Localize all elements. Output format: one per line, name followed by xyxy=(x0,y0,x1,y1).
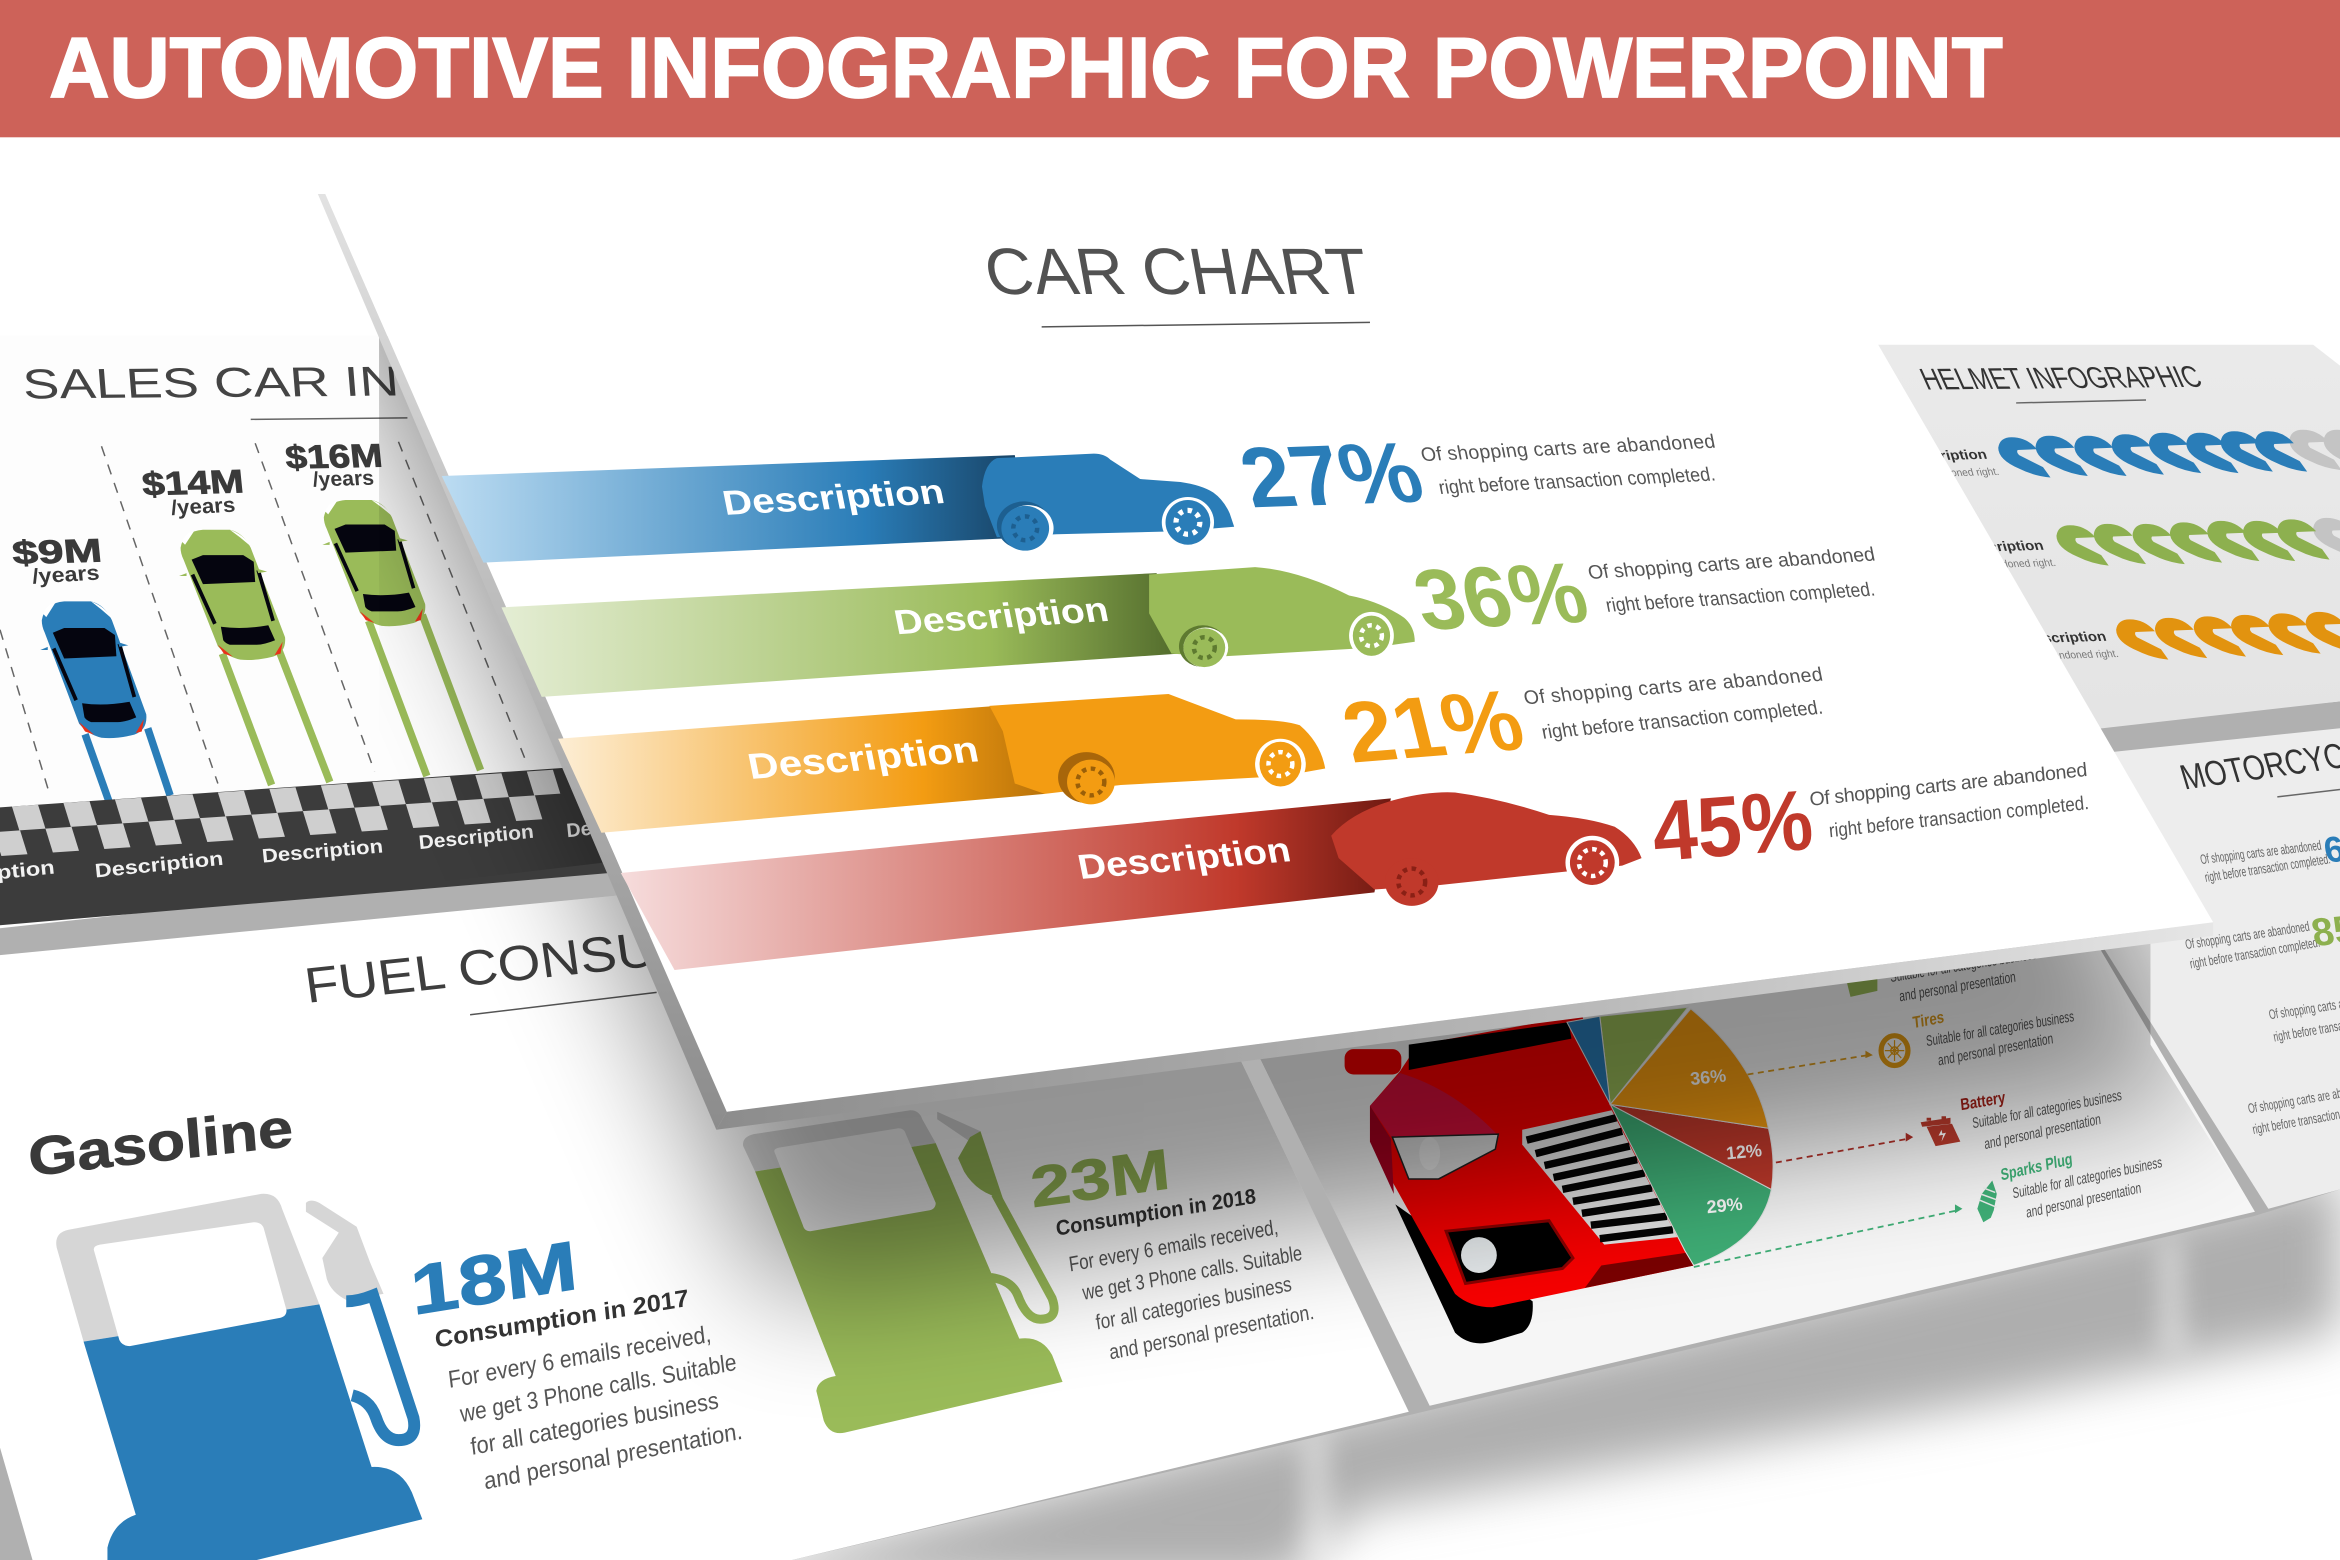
bar: red car 45%: 45% xyxy=(1649,773,1816,880)
lane dividers xyxy=(0,442,525,795)
panel: car parts pie slide xyxy=(1239,910,2255,1406)
finish line band: Description xyxy=(418,821,535,854)
callout: tires xyxy=(1748,1007,2075,1074)
callout: battery: and personal presentation xyxy=(1984,1111,2102,1153)
callout: sparks plug xyxy=(1694,1149,2163,1267)
callout: tires: Tires xyxy=(1912,1007,1945,1032)
heading: car chart: CAR CHART xyxy=(979,235,1374,309)
bar: green car 36%: right before transaction completed. xyxy=(1604,579,1877,617)
icon: tire xyxy=(1881,1036,1908,1066)
car lane: $9M xyxy=(10,532,170,801)
callout: top legend: and personal presentation xyxy=(1898,969,2017,1005)
callout: sparks plug: and personal presentation xyxy=(2025,1180,2142,1222)
bar: red car 45% xyxy=(621,759,2090,970)
heading: helmet: HELMET INFOGRAPHIC xyxy=(1915,360,2207,396)
stat: 18M: 18M xyxy=(407,1226,581,1330)
finish line band: Description xyxy=(261,835,384,868)
stat rows xyxy=(2184,828,2340,1137)
stat: 18M: For every 6 emails received, xyxy=(447,1321,713,1394)
row: green helmets xyxy=(1959,518,2340,572)
pie chart: 29% xyxy=(1706,1194,1743,1217)
car lane: $14M: /years xyxy=(170,494,236,520)
wheels xyxy=(1058,739,1306,804)
wheels xyxy=(1385,836,1619,906)
car lane: $9M: /years xyxy=(31,562,100,588)
bar: red car 45%: Description xyxy=(1075,831,1294,887)
stat: 23M: we get 3 Phone calls. Suitable xyxy=(1080,1242,1304,1305)
bar: green car 36%: 36% xyxy=(1405,546,1597,648)
row: blue helmets: Description xyxy=(1902,447,1989,464)
bar: orange car 21% xyxy=(558,664,1825,833)
callout: battery: Battery xyxy=(1959,1088,2007,1114)
car lane: $9M: $9M xyxy=(10,532,104,571)
row: green helmets: Description xyxy=(1959,538,2045,555)
heading: fuel consumption: FUEL CONSU xyxy=(301,921,660,1014)
callout: battery: Suitable for all categories business xyxy=(1972,1087,2123,1132)
stat: 18M: we get 3 Phone calls. Suitable xyxy=(458,1349,738,1428)
pie chart xyxy=(1567,1007,1773,1266)
row: blue helmets xyxy=(1902,430,2340,480)
drop shadow below slides xyxy=(701,1171,2340,1560)
panel: helmet slide xyxy=(1851,345,2340,730)
callout: top legend xyxy=(1845,946,2037,1005)
icon: blue fuel pump xyxy=(56,1194,422,1560)
callout: sparks plug: Suitable for all categories business xyxy=(2012,1154,2163,1202)
bar: blue car 27%: Description xyxy=(719,473,948,523)
heading: gasoline: Gasoline xyxy=(26,1098,295,1188)
row: orange helmets xyxy=(2022,612,2340,663)
callout: top legend: Suitable for all categories business xyxy=(1890,946,2037,986)
finish line band xyxy=(0,767,675,925)
car lane: $16M: /years xyxy=(312,467,375,491)
panel: motorcycle slide xyxy=(2089,728,2340,1209)
bar: blue car 27%: right before transaction completed. xyxy=(1437,464,1717,499)
heading: sales car: SALES CAR IN xyxy=(21,358,401,407)
icon: green fuel pump xyxy=(743,1110,1063,1433)
bar: green car 36%: Of shopping carts are abandoned xyxy=(1586,544,1877,584)
bar: blue car 27% xyxy=(442,425,1717,563)
icon: battery xyxy=(1921,1116,1960,1146)
row: green helmets: Of abandoned right. xyxy=(1964,557,2057,572)
callout: tires: Suitable for all categories business xyxy=(1925,1008,2075,1050)
bar: orange car 21%: right before transaction completed. xyxy=(1540,697,1825,744)
car lane: $14M: $14M xyxy=(140,462,245,502)
car lane: $16M xyxy=(284,437,481,776)
callout: battery xyxy=(1776,1087,2123,1163)
finish line band: Description xyxy=(565,810,675,842)
bar: orange car 21%: Description xyxy=(744,728,982,787)
illustration: red car front xyxy=(1345,1015,1694,1343)
stat: 23M: for all categories business xyxy=(1094,1273,1293,1335)
row: blue helmets: Of abandoned right. xyxy=(1908,466,2001,480)
stat: 18M xyxy=(407,1226,744,1495)
callout: sparks plug: Sparks Plug xyxy=(2000,1149,2073,1184)
bar: orange car 21%: 21% xyxy=(1333,673,1533,781)
stat: 18M: Consumption in 2017 xyxy=(434,1285,690,1354)
slide gaps underlay xyxy=(0,701,2340,1560)
stat: 23M xyxy=(1028,1137,1315,1364)
panel: car chart main slide xyxy=(318,194,2213,1130)
bar: green car 36% xyxy=(501,544,1877,697)
wheels xyxy=(1179,612,1394,668)
car lane: $14M xyxy=(140,462,330,785)
row: orange helmets: Of abandoned right. xyxy=(2027,648,2120,663)
pie chart: 36% xyxy=(1689,1065,1727,1089)
finish line band: Description xyxy=(94,848,224,882)
pie chart: 12% xyxy=(1725,1140,1763,1164)
stat: 18M: and personal presentation. xyxy=(483,1418,744,1495)
shadow cast by main slide xyxy=(303,224,2201,1298)
bar: blue car 27%: Of shopping carts are abandoned xyxy=(1419,431,1717,466)
bar: blue car 27%: 27% xyxy=(1229,425,1434,526)
stat: 23M: and personal presentation. xyxy=(1108,1301,1315,1364)
callout: tires: and personal presentation xyxy=(1937,1030,2054,1069)
panel: sales car slide xyxy=(0,336,675,928)
car lane: $16M: $16M xyxy=(284,437,384,476)
stat: 18M: for all categories business xyxy=(469,1387,720,1461)
bar: orange car 21%: Of shopping carts are abandoned xyxy=(1522,664,1825,709)
title banner xyxy=(0,0,2340,137)
bar: green car 36%: Description xyxy=(891,591,1112,642)
stat: 23M: Consumption in 2018 xyxy=(1055,1185,1257,1241)
icon: spark plug xyxy=(1977,1180,1997,1222)
row: orange helmets: Description xyxy=(2022,629,2108,646)
title banner: AUTOMOTIVE INFOGRAPHIC FOR POWERPOINT xyxy=(49,21,2003,116)
bar: red car 45%: right before transaction completed. xyxy=(1828,792,2090,842)
stat: 23M: For every 6 emails received, xyxy=(1068,1216,1280,1276)
stat: 23M: 23M xyxy=(1028,1137,1173,1220)
bar: red car 45%: Of shopping carts are abandoned xyxy=(1809,759,2088,811)
panel: fuel consumption slide xyxy=(0,895,1409,1560)
wheels xyxy=(997,497,1214,551)
